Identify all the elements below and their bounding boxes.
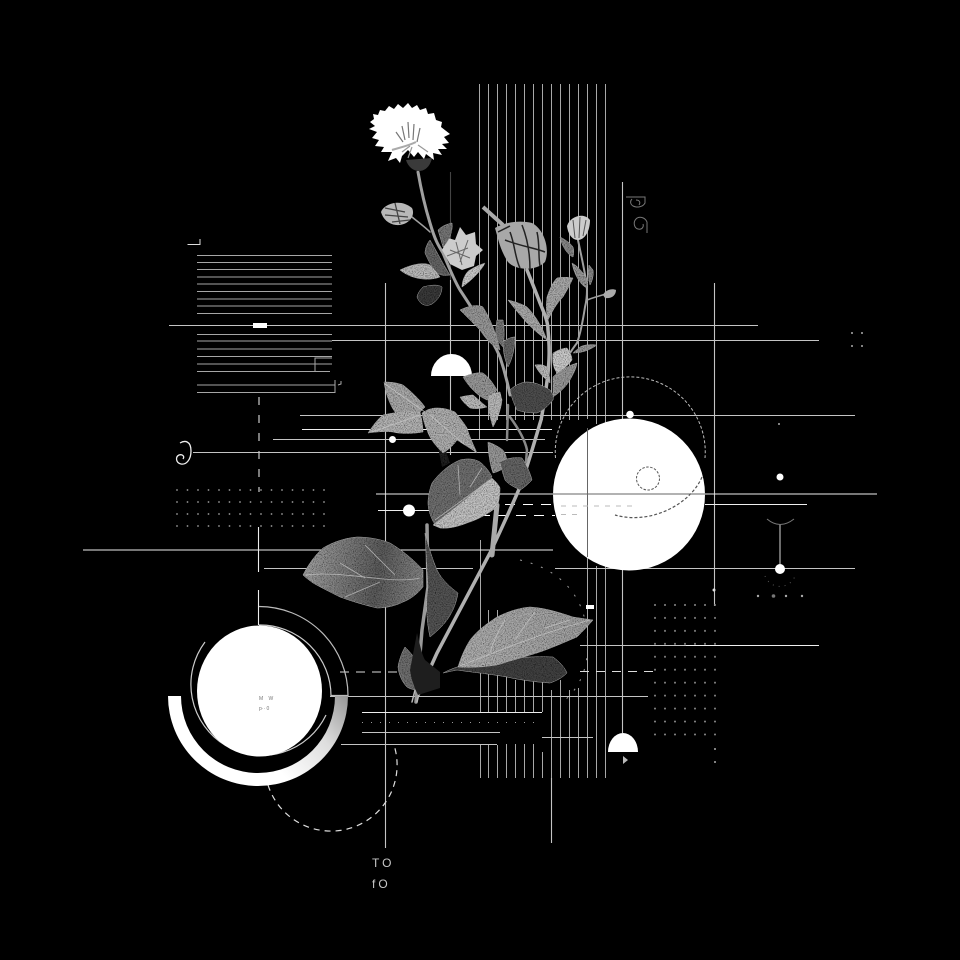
upper flower — [369, 103, 450, 171]
small dots cluster — [712, 332, 863, 763]
small overlay tick marks — [386, 610, 455, 696]
micro labels in disc: M W — [259, 696, 275, 702]
line block panel — [188, 239, 335, 393]
leaf veins — [306, 384, 590, 666]
plant illustration — [303, 103, 616, 702]
dashed arc lower left — [268, 745, 397, 831]
half dome lower — [608, 733, 638, 752]
icon: glyphs top right — [626, 197, 647, 233]
upper small leaves — [400, 223, 597, 373]
dark dashed curve in circle — [615, 477, 702, 518]
micro label line two: p·· 0 — [259, 706, 270, 712]
small corner tick — [338, 381, 341, 385]
dot grid right — [650, 599, 720, 742]
middle leaf pair — [368, 382, 532, 528]
cluster leaves — [460, 363, 577, 427]
small triangle — [623, 756, 628, 764]
stems — [412, 172, 610, 702]
icon: looped glyph left — [177, 442, 191, 464]
white dot on circle top — [626, 411, 634, 418]
left circle group — [168, 606, 348, 786]
bottom labels: TO — [372, 856, 394, 870]
crescent — [168, 696, 348, 786]
horizontal and vertical construction lines — [83, 172, 877, 848]
right large white circle — [553, 418, 705, 570]
leaves — [303, 223, 597, 690]
short white tab — [586, 605, 594, 609]
outer thin arc — [259, 606, 348, 696]
vertical line grid — [480, 84, 606, 778]
dashed arc lower centre — [520, 560, 588, 700]
inner thin ring — [191, 625, 331, 755]
small dashed ring — [636, 467, 660, 490]
right axis marker — [765, 474, 795, 586]
buds — [381, 203, 616, 298]
stem knot — [410, 633, 440, 695]
dot grid left — [172, 484, 330, 532]
small nodes — [389, 436, 415, 516]
white disc — [197, 626, 322, 756]
dashed orbit around circle — [555, 377, 705, 458]
bottom label two: fO — [372, 877, 391, 891]
lower right leaves — [443, 607, 593, 683]
white marker on line block — [253, 323, 267, 328]
half dome upper — [431, 354, 472, 376]
grey lines inside circle — [553, 428, 705, 557]
lower left leaves — [303, 533, 458, 690]
